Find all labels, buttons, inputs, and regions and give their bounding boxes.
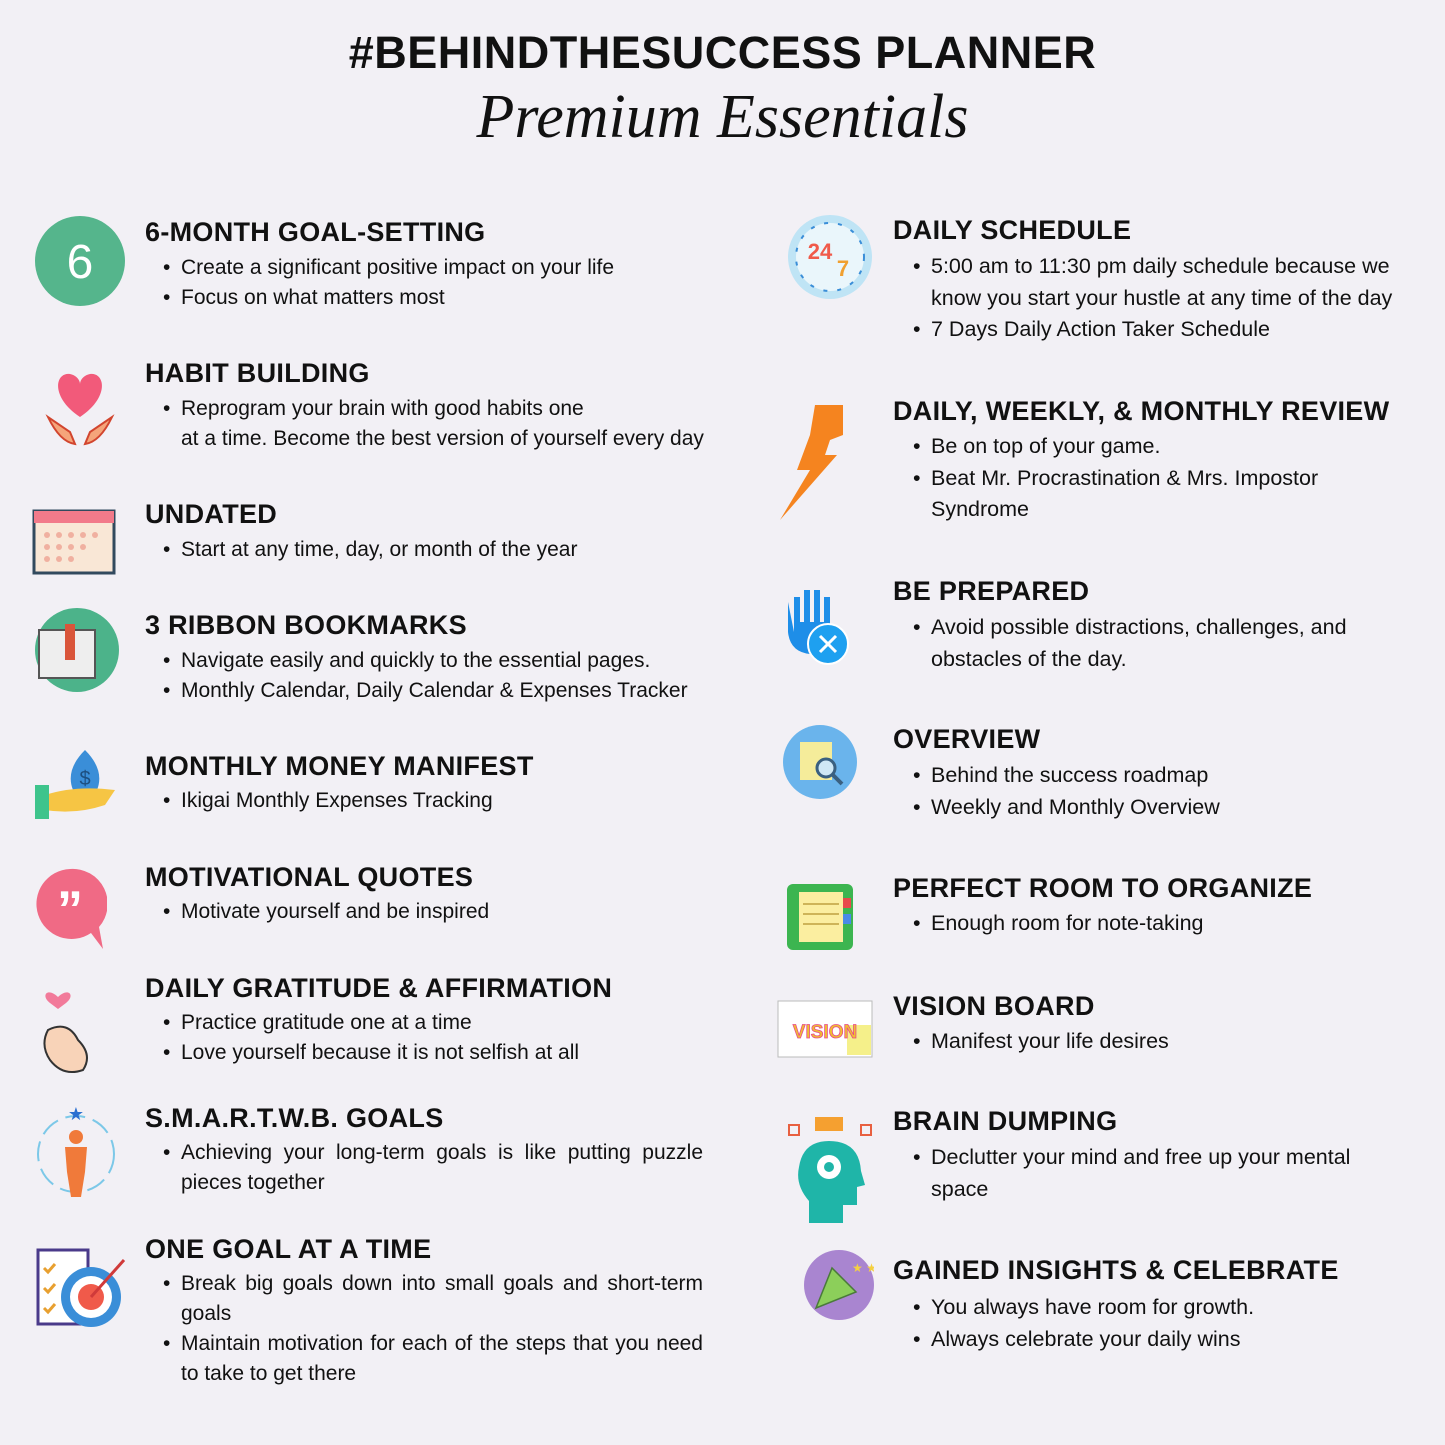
item: 6-month goal-setting: Create a significant positive impact on your life <box>181 256 614 279</box>
icon: person target: ★ <box>68 1104 84 1124</box>
icon: quote bubble: ” <box>57 881 83 939</box>
item: overview: Behind the success roadmap <box>931 763 1208 787</box>
item: vision board: VISION BOARD <box>893 991 1095 1021</box>
item: perfect room: PERFECT ROOM TO ORGANIZE <box>893 873 1312 903</box>
item: overview <box>783 724 1220 818</box>
title: #BEHINDTHESUCCESS PLANNER <box>349 27 1096 78</box>
icon: checklist target <box>36 1248 125 1327</box>
item: SMART goals <box>37 1103 703 1197</box>
item: SMART goals: Achieving your long-term goals is like putting puzzle <box>181 1141 703 1164</box>
item: vision board: Manifest your life desires <box>931 1029 1169 1053</box>
item: gained insights: You always have room for growth. <box>931 1295 1254 1319</box>
item: ribbon bookmarks: Monthly Calendar, Daily Calendar & Expenses Tracker <box>181 679 688 702</box>
item: brain dumping: BRAIN DUMPING <box>893 1106 1117 1136</box>
item: gratitude <box>43 973 612 1073</box>
item: daily schedule: know you start your hustle at any time of the day <box>931 286 1392 310</box>
item: habit building: HABIT BUILDING <box>145 358 370 388</box>
item: overview: OVERVIEW <box>893 724 1040 754</box>
item: gratitude: DAILY GRATITUDE & AFFIRMATION <box>145 973 612 1003</box>
icon: party popper <box>804 1250 874 1320</box>
item: monthly money manifest: MONTHLY MONEY MANIFEST <box>145 751 534 781</box>
icon: finger heart <box>43 992 88 1073</box>
icon: six: 6 <box>67 236 93 289</box>
item: review: Syndrome <box>931 497 1029 521</box>
icon: heart hands <box>46 374 114 446</box>
item: be prepared: BE PREPARED <box>893 576 1089 606</box>
item: be prepared: Avoid possible distractions, challenges, and <box>931 615 1347 639</box>
icon: notebook <box>787 884 853 950</box>
item: gratitude: Love yourself because it is not selfish at all <box>181 1041 579 1064</box>
item: one goal at a time <box>36 1234 703 1385</box>
icon: 24/7 clock <box>788 215 872 299</box>
item: gained insights: Always celebrate your daily wins <box>931 1326 1240 1350</box>
item: brain dumping: space <box>931 1176 988 1200</box>
item: gained insights <box>804 1250 1339 1350</box>
icon: 24/7 clock: 24 <box>808 239 833 264</box>
item: ribbon bookmarks: 3 RIBBON BOOKMARKS <box>145 610 467 640</box>
icon: quote bubble <box>36 868 107 949</box>
item: one goal at a time: to take to get there <box>181 1362 356 1385</box>
item: SMART goals: pieces together <box>181 1171 325 1194</box>
item: motivational quotes: MOTIVATIONAL QUOTES <box>145 862 473 892</box>
subtitle: Premium Essentials <box>477 83 968 151</box>
icon: head gear <box>788 1117 872 1223</box>
icon: person target <box>37 1104 115 1197</box>
item: habit building: at a time. Become the best version of yourself every day <box>181 427 704 450</box>
icon: 24/7 clock: 7 <box>837 256 849 281</box>
item: overview: Weekly and Monthly Overview <box>931 794 1220 818</box>
item: ribbon bookmarks <box>35 608 688 702</box>
item: motivational quotes: Motivate yourself and be inspired <box>181 900 489 923</box>
icon: money hand: $ <box>79 768 91 790</box>
item: monthly money manifest <box>35 750 534 819</box>
item: undated <box>32 499 578 574</box>
item: habit building <box>46 358 704 450</box>
item: undated: UNDATED <box>145 499 277 529</box>
item: be prepared <box>788 576 1347 670</box>
item: be prepared: obstacles of the day. <box>931 646 1127 670</box>
item: gained insights: GAINED INSIGHTS & CELEBRATE <box>893 1255 1339 1285</box>
item: undated: Start at any time, day, or month of the year <box>181 538 577 561</box>
item: review: Be on top of your game. <box>931 434 1160 458</box>
icon: vision board <box>778 1000 872 1058</box>
item: vision board <box>778 991 1169 1058</box>
item: 6-month goal-setting <box>35 216 614 309</box>
item: perfect room <box>787 873 1312 950</box>
item: one goal at a time: Break big goals down into small goals and short-term <box>181 1272 703 1295</box>
item: motivational quotes <box>36 862 489 949</box>
item: one goal at a time: ONE GOAL AT A TIME <box>145 1234 431 1264</box>
item: daily schedule: DAILY SCHEDULE <box>893 215 1131 245</box>
icon: six <box>35 216 125 306</box>
item: brain dumping <box>788 1106 1350 1223</box>
item: review <box>780 396 1390 521</box>
item: review: DAILY, WEEKLY, & MONTHLY REVIEW <box>893 396 1389 426</box>
icon: vision board: VISION <box>793 1022 857 1043</box>
item: one goal at a time: Maintain motivation for each of the steps that you need <box>181 1332 703 1355</box>
item: gratitude: Practice gratitude one at a time <box>181 1011 472 1034</box>
item: daily schedule <box>788 215 1392 341</box>
item: 6-month goal-setting: 6-MONTH GOAL-SETTING <box>145 217 485 247</box>
item: daily schedule: 5:00 am to 11:30 pm daily schedule because we <box>931 254 1390 278</box>
item: one goal at a time: goals <box>181 1302 231 1325</box>
item: SMART goals: S.M.A.R.T.W.B. GOALS <box>145 1103 444 1133</box>
icon: hand stop <box>788 590 849 665</box>
item: 6-month goal-setting: Focus on what matters most <box>181 286 445 309</box>
icon: book <box>35 608 119 692</box>
item: perfect room: Enough room for note-taking <box>931 911 1204 935</box>
item: brain dumping: Declutter your mind and free up your mental <box>931 1145 1350 1169</box>
item: daily schedule: 7 Days Daily Action Taker Schedule <box>931 317 1270 341</box>
item: review: Beat Mr. Procrastination & Mrs. Impostor <box>931 466 1318 490</box>
icon: magnifier doc <box>783 725 857 799</box>
icon: calendar <box>32 510 116 574</box>
item: monthly money manifest: Ikigai Monthly Expenses Tracking <box>181 789 493 812</box>
item: ribbon bookmarks: Navigate easily and quickly to the essential pages. <box>181 649 650 672</box>
item: habit building: Reprogram your brain with good habits one <box>181 397 584 420</box>
icon: money hand <box>35 750 115 819</box>
icon: fist lightning <box>780 405 843 520</box>
